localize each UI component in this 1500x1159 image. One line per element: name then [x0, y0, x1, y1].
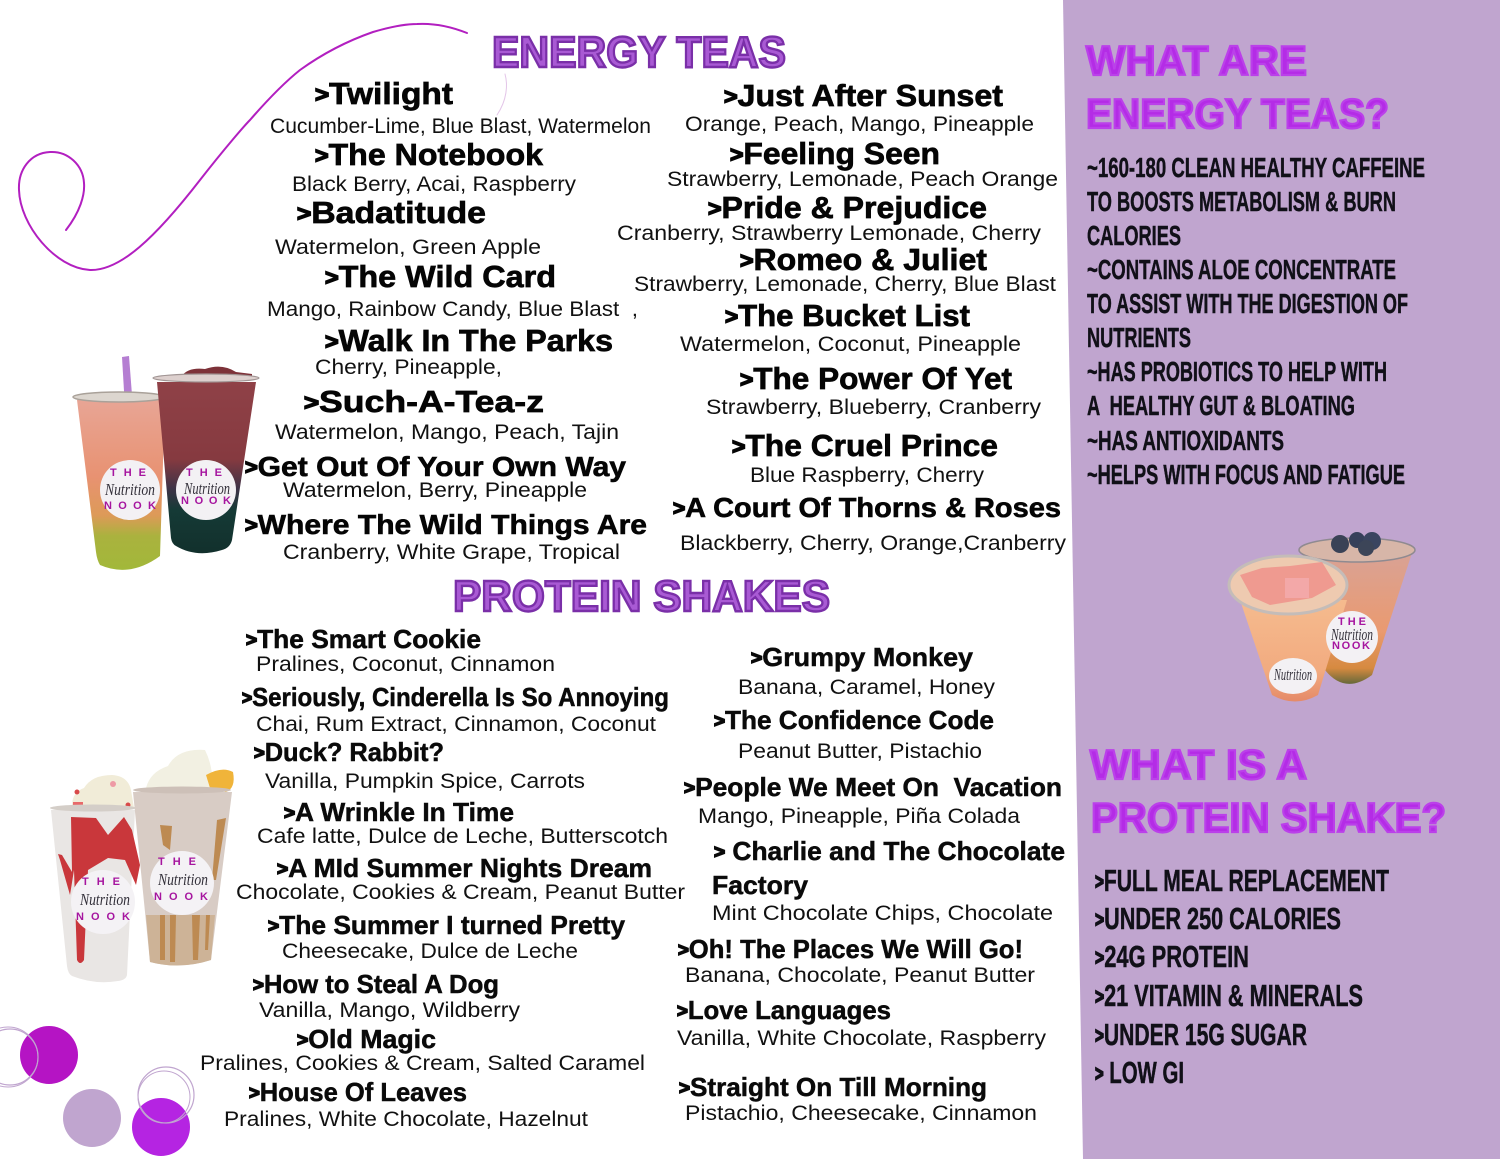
- heading: Energy Teas: ENERGY TEAS: [492, 28, 786, 77]
- sticker: caramel shake logo: NOOK: [154, 891, 208, 903]
- shake: Oh! The Places We Will Go!: >Oh! The Places We Will Go!: [678, 934, 1023, 964]
- list: protein shakes left column: [200, 624, 685, 1131]
- photo: two protein shake cups: [50, 750, 234, 982]
- drink: Where The Wild Things Are: [245, 509, 647, 564]
- drink: A Court Of Thorns & Roses: [673, 492, 1067, 555]
- drink: Walk In The Parks: Cherry, Pineapple,: [315, 356, 502, 379]
- sticker: back cup logo: NOOK: [1332, 640, 1370, 652]
- shake: Charlie and The Chocolate Factory: Mint Chocolate Chips, Chocolate: [712, 902, 1053, 925]
- drink: The Bucket List: >The Bucket List: [725, 298, 970, 333]
- drink: The Bucket List: Watermelon, Coconut, Pineapple: [680, 333, 1021, 356]
- drink: The Wild Card: [267, 259, 638, 321]
- shake: The Smart Cookie: [246, 624, 555, 676]
- drink: Pride & Prejudice: [617, 190, 1042, 245]
- heading: Protein Shakes: PROTEIN SHAKES: [453, 572, 830, 621]
- shake: Old Magic: >Old Magic: [297, 1024, 436, 1054]
- shake: The Confidence Code: >The Confidence Code: [714, 705, 994, 735]
- drink: Pride & Prejudice: >Pride & Prejudice: [708, 190, 987, 225]
- text block: protein shake facts: > LOW GI: [1095, 1055, 1184, 1090]
- text block: protein shake facts: >21 VITAMIN & MINERALS: [1095, 978, 1363, 1013]
- shake: A MId Summer Nights Dream: >A MId Summer Nights Dream: [277, 853, 652, 883]
- drink: The Cruel Prince: >The Cruel Prince: [732, 428, 998, 463]
- sticker: left cup logo: Nutrition: [104, 480, 155, 499]
- drink: The Wild Card: >The Wild Card: [325, 259, 556, 294]
- sticker: back cup logo: Nutrition: [1330, 625, 1373, 644]
- heading: What Is A Protein Shake?: PROTEIN SHAKE?: [1091, 794, 1446, 841]
- text block: energy tea facts: A HEALTHY GUT & BLOATING: [1087, 390, 1355, 421]
- drink: Feeling Seen: >Feeling Seen: [730, 136, 940, 171]
- sticker: strawberry shake logo: [71, 870, 135, 934]
- shake: Straight On Till Morning: Pistachio, Cheesecake, Cinnamon: [685, 1102, 1037, 1125]
- drink: A Court Of Thorns & Roses: Blackberry, Cherry, Orange,Cranberry: [680, 532, 1067, 555]
- sticker: right cup logo: NOOK: [181, 495, 231, 507]
- shake: Love Languages: >Love Languages: [677, 995, 891, 1025]
- drink: Feeling Seen: Strawberry, Lemonade, Peach Orange: [667, 168, 1058, 191]
- shake: How to Steal A Dog: [253, 969, 521, 1022]
- shake: Charlie and The Chocolate Factory: > Charlie and The Chocolate: [714, 836, 1065, 866]
- shake: The Confidence Code: Peanut Butter, Pistachio: [738, 740, 982, 763]
- shake: Love Languages: Vanilla, White Chocolate, Raspberry: [677, 1027, 1047, 1050]
- shake: People We Meet On Vacation: Mango, Pineapple, Piña Colada: [698, 805, 1020, 828]
- text block: protein shake facts: >UNDER 15G SUGAR: [1095, 1017, 1307, 1052]
- shake: Seriously, Cinderella Is So Annoying: Chai, Rum Extract, Cinnamon, Coconut: [256, 713, 656, 736]
- text block: energy tea facts: CALORIES: [1087, 220, 1181, 251]
- drink: The Cruel Prince: [732, 428, 998, 487]
- drink: Where The Wild Things Are: Cranberry, White Grape, Tropical: [283, 541, 620, 564]
- drink: Such-A-Tea-z: Watermelon, Mango, Peach, Tajin: [275, 421, 619, 444]
- list: protein shakes right column: [677, 642, 1065, 1125]
- shake: A Wrinkle In Time: >A Wrinkle In Time: [284, 797, 514, 827]
- shake: The Summer I turned Pretty: Cheesecake, Dulce de Leche: [282, 940, 578, 963]
- drink: Twilight: [270, 76, 651, 138]
- drink: The Power Of Yet: >The Power Of Yet: [740, 361, 1012, 396]
- sticker: back cup logo: [1326, 611, 1378, 663]
- shake: Love Languages: [677, 995, 1047, 1050]
- drink: Just After Sunset: >Just After Sunset: [724, 78, 1003, 113]
- sticker: right cup logo: THE: [186, 467, 229, 479]
- shake: Grumpy Monkey: [738, 642, 996, 699]
- shake: The Smart Cookie: Pralines, Coconut, Cinnamon: [256, 653, 555, 676]
- drink: A Court Of Thorns & Roses: >A Court Of Thorns & Roses: [673, 492, 1061, 523]
- drink: Such-A-Tea-z: [275, 384, 619, 444]
- drink: Feeling Seen: [667, 136, 1058, 191]
- drink: Badatitude: [275, 195, 541, 259]
- drink: Romeo & Juliet: >Romeo & Juliet: [740, 242, 987, 277]
- shake: Straight On Till Morning: [679, 1072, 1037, 1125]
- sticker: caramel shake logo: Nutrition: [157, 870, 208, 889]
- drink: Badatitude: >Badatitude: [297, 195, 486, 230]
- shake: House Of Leaves: >House Of Leaves: [249, 1077, 467, 1107]
- drink: Walk In The Parks: >Walk In The Parks: [325, 323, 613, 358]
- sidebar: what is a protein shake: [1090, 741, 1446, 1090]
- text block: energy tea facts: [1087, 152, 1425, 490]
- drink: Get Out Of Your Own Way: >Get Out Of Your Own Way: [245, 451, 626, 482]
- sticker: caramel shake logo: [150, 851, 214, 915]
- sticker: front cup logo: [1269, 658, 1317, 694]
- drink: Twilight: >Twilight: [315, 76, 453, 111]
- shake: The Summer I turned Pretty: >The Summer I turned Pretty: [268, 910, 626, 940]
- heading: What Are Energy Teas?: WHAT ARE: [1086, 37, 1307, 84]
- text block: protein shake facts: >UNDER 250 CALORIES: [1095, 901, 1341, 936]
- drink: Twilight: Cucumber-Lime, Blue Blast, Watermelon: [270, 115, 651, 138]
- shake: Old Magic: Pralines, Cookies & Cream, Salted Caramel: [200, 1052, 645, 1075]
- panel: purple sidebar background: [1063, 0, 1500, 1159]
- drink: Such-A-Tea-z: >Such-A-Tea-z: [304, 384, 544, 419]
- photo: two energy tea cups: [73, 356, 259, 570]
- sticker: caramel shake logo: THE: [158, 856, 204, 868]
- decorative swirl line: [19, 24, 506, 270]
- shake: Oh! The Places We Will Go!: Banana, Chocolate, Peanut Butter: [685, 964, 1035, 987]
- shake: Straight On Till Morning: >Straight On Till Morning: [679, 1072, 987, 1102]
- heading: What Are Energy Teas?: ENERGY TEAS?: [1086, 90, 1389, 137]
- sticker: left cup logo: NOOK: [104, 500, 156, 512]
- list: energy teas right column: [617, 78, 1067, 555]
- shake: The Confidence Code: [714, 705, 994, 763]
- shake: Grumpy Monkey: Banana, Caramel, Honey: [738, 676, 996, 699]
- drink: The Notebook: Black Berry, Acai, Raspberry: [292, 173, 577, 196]
- shake: House Of Leaves: Pralines, White Chocolate, Hazelnut: [224, 1108, 588, 1131]
- shake: Duck? Rabbit?: >Duck? Rabbit?: [254, 737, 444, 767]
- shake: House Of Leaves: [224, 1077, 588, 1131]
- drink: Pride & Prejudice: Cranberry, Strawberry Lemonade, Cherry: [617, 222, 1042, 245]
- drink: Walk In The Parks: [315, 323, 613, 379]
- shake: The Smart Cookie: >The Smart Cookie: [246, 624, 481, 654]
- shake: Grumpy Monkey: >Grumpy Monkey: [751, 642, 974, 672]
- drink: Where The Wild Things Are: >Where The Wild Things Are: [245, 509, 647, 540]
- drink: Just After Sunset: [685, 78, 1034, 136]
- drink: The Wild Card: Mango, Rainbow Candy, Blue Blast ,: [267, 298, 638, 321]
- shake: Old Magic: [200, 1024, 645, 1075]
- drink: The Notebook: [292, 137, 577, 196]
- shake: The Summer I turned Pretty: [268, 910, 626, 963]
- shake: How to Steal A Dog: Vanilla, Mango, Wildberry: [259, 999, 521, 1022]
- sticker: left cup logo: THE: [110, 467, 153, 479]
- sticker: strawberry shake logo: NOOK: [76, 911, 130, 923]
- shake: People We Meet On Vacation: [684, 772, 1062, 828]
- shake: Oh! The Places We Will Go!: [678, 934, 1035, 987]
- sticker: left cup logo: [100, 460, 160, 520]
- shake: Seriously, Cinderella Is So Annoying: [242, 682, 669, 736]
- sticker: right cup logo: [176, 460, 236, 520]
- shake: How to Steal A Dog: >How to Steal A Dog: [253, 969, 499, 999]
- shake: Seriously, Cinderella Is So Annoying: >Seriously, Cinderella Is So Annoying: [242, 682, 669, 712]
- drink: Get Out Of Your Own Way: Watermelon, Berry, Pineapple: [283, 479, 587, 502]
- decorative circles: [0, 1026, 194, 1156]
- shake: People We Meet On Vacation: >People We Meet On Vacation: [684, 772, 1062, 802]
- drink: The Cruel Prince: Blue Raspberry, Cherry: [750, 464, 985, 487]
- shake: A MId Summer Nights Dream: Chocolate, Cookies & Cream, Peanut Butter: [236, 881, 685, 904]
- sticker: right cup logo: Nutrition: [183, 479, 230, 498]
- text block: energy tea facts: ~HAS ANTIOXIDANTS: [1087, 425, 1284, 456]
- shake: A Wrinkle In Time: Cafe latte, Dulce de Leche, Butterscotch: [257, 825, 668, 848]
- list: energy teas left column: [245, 76, 651, 564]
- sidebar: what are energy teas: [1086, 37, 1425, 490]
- sticker: strawberry shake logo: THE: [82, 876, 128, 888]
- shake: Duck? Rabbit?: [254, 737, 585, 793]
- drink: The Bucket List: [680, 298, 1021, 356]
- sticker: front cup logo: Nutrition: [1273, 665, 1312, 684]
- heading: What Is A Protein Shake?: WHAT IS A: [1090, 741, 1307, 788]
- sticker: back cup logo: THE: [1338, 616, 1369, 628]
- shake: A MId Summer Nights Dream: [236, 853, 685, 904]
- heading: What Is A Protein Shake?: [1090, 741, 1446, 841]
- drink: Romeo & Juliet: Strawberry, Lemonade, Cherry, Blue Blast: [634, 273, 1056, 296]
- heading: What Are Energy Teas?: [1086, 37, 1389, 137]
- photo: two fruit topped energy teas: [1229, 532, 1415, 702]
- drink: The Notebook: >The Notebook: [315, 137, 544, 172]
- shake: Charlie and The Chocolate Factory: [712, 836, 1065, 925]
- text block: protein shake facts: >24G PROTEIN: [1095, 939, 1249, 974]
- text block: protein shake facts: [1095, 863, 1389, 1090]
- drink: Get Out Of Your Own Way: [245, 451, 626, 502]
- sticker: strawberry shake logo: Nutrition: [79, 890, 130, 909]
- text block: energy tea facts: NUTRIENTS: [1087, 322, 1191, 353]
- drink: Badatitude: Watermelon, Green Apple: [275, 236, 541, 259]
- shake: Charlie and The Chocolate Factory: Factory: [712, 870, 809, 900]
- drink: The Power Of Yet: [706, 361, 1042, 419]
- drink: The Power Of Yet: Strawberry, Blueberry, Cranberry: [706, 396, 1042, 419]
- drink: Romeo & Juliet: [634, 242, 1056, 296]
- shake: A Wrinkle In Time: [257, 797, 668, 848]
- drink: Just After Sunset: Orange, Peach, Mango, Pineapple: [685, 113, 1034, 136]
- shake: Duck? Rabbit?: Vanilla, Pumpkin Spice, Carrots: [265, 770, 585, 793]
